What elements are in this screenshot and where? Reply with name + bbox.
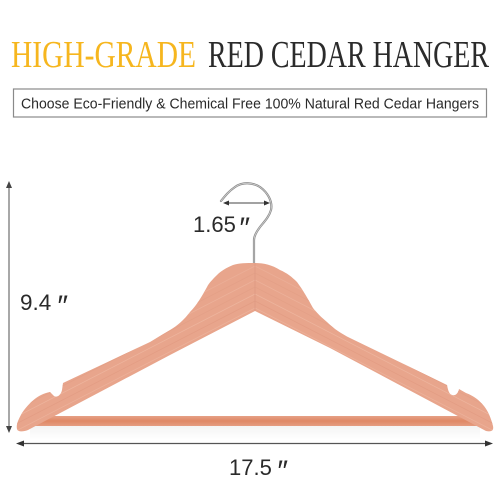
hook width label <box>193 212 250 245</box>
subtitle box: Choose Eco-Friendly & Chemical Free 100% Natural Red Cedar Hangers <box>21 96 479 112</box>
width dimension arrow <box>16 440 493 446</box>
wooden crossbar <box>35 416 477 426</box>
hanger <box>0 183 500 440</box>
icon: metal hook <box>221 183 271 264</box>
hook width label: 1.65 <box>193 212 236 237</box>
height label <box>20 290 68 323</box>
hook width label: ″ <box>238 212 250 245</box>
title <box>11 34 489 76</box>
subtitle box <box>14 89 486 117</box>
height label: ″ <box>56 290 68 323</box>
hook width dimension arrow <box>223 200 270 206</box>
width label <box>229 455 288 488</box>
wooden body <box>16 263 494 432</box>
width label: 17.5 <box>229 455 272 480</box>
title: high-grade: HIGH-GRADE <box>11 34 196 76</box>
floor shadow <box>30 426 480 440</box>
height dimension arrow <box>6 181 12 433</box>
height label: 9.4 <box>20 290 51 315</box>
width label: ″ <box>276 455 288 488</box>
